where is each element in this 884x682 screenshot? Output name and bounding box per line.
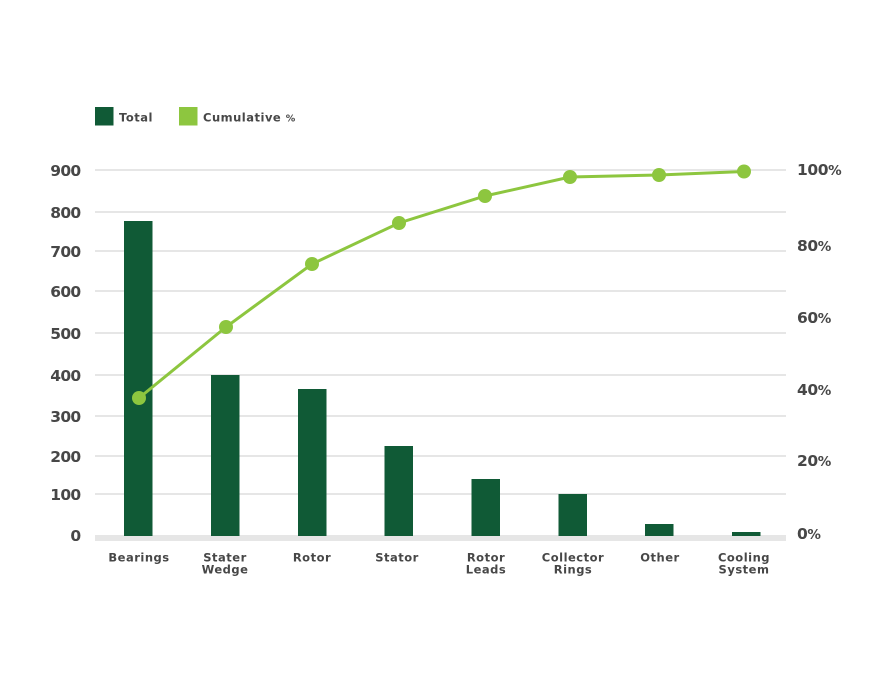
legend [95,107,296,126]
category labels: Wedge [202,562,248,576]
category labels: Bearings [108,550,170,564]
left axis labels: 800 [50,204,81,222]
left axis labels [50,162,81,545]
left axis labels: 200 [50,448,81,466]
legend label: cumulative: Cumulative % [203,110,296,124]
category labels: Cooling [718,550,770,564]
bars [124,221,760,536]
category labels: Rotor [467,550,505,564]
category labels: Rotor [293,550,331,564]
right axis labels: 60% [797,309,832,327]
category labels: Stator [375,550,419,564]
left axis labels: 400 [50,367,81,385]
category labels: Other [640,550,680,564]
right axis labels: 20% [797,452,832,470]
left axis labels: 600 [50,283,81,301]
category labels: Stater [203,550,247,564]
category labels: Collector [542,550,604,564]
right axis labels: 80% [797,237,832,255]
legend swatch: total [95,107,114,126]
right axis labels [797,161,842,543]
category labels [108,550,770,576]
left axis labels: 700 [50,243,81,261]
cumulative points [132,164,751,405]
left axis labels: 0 [70,527,81,545]
right axis labels: 0% [797,525,821,543]
left axis labels: 900 [50,162,81,180]
left axis labels: 100 [50,486,81,504]
left axis labels: 500 [50,325,81,343]
category labels: Leads [466,562,506,576]
right axis labels: 40% [797,381,832,399]
cumulative line [139,172,744,398]
legend swatch: cumulative [179,107,198,126]
legend label: total: Total [119,110,153,124]
right axis labels: 100% [797,161,842,179]
category labels: Rings [554,562,592,576]
category labels: System [719,562,769,576]
left axis labels: 300 [50,408,81,426]
